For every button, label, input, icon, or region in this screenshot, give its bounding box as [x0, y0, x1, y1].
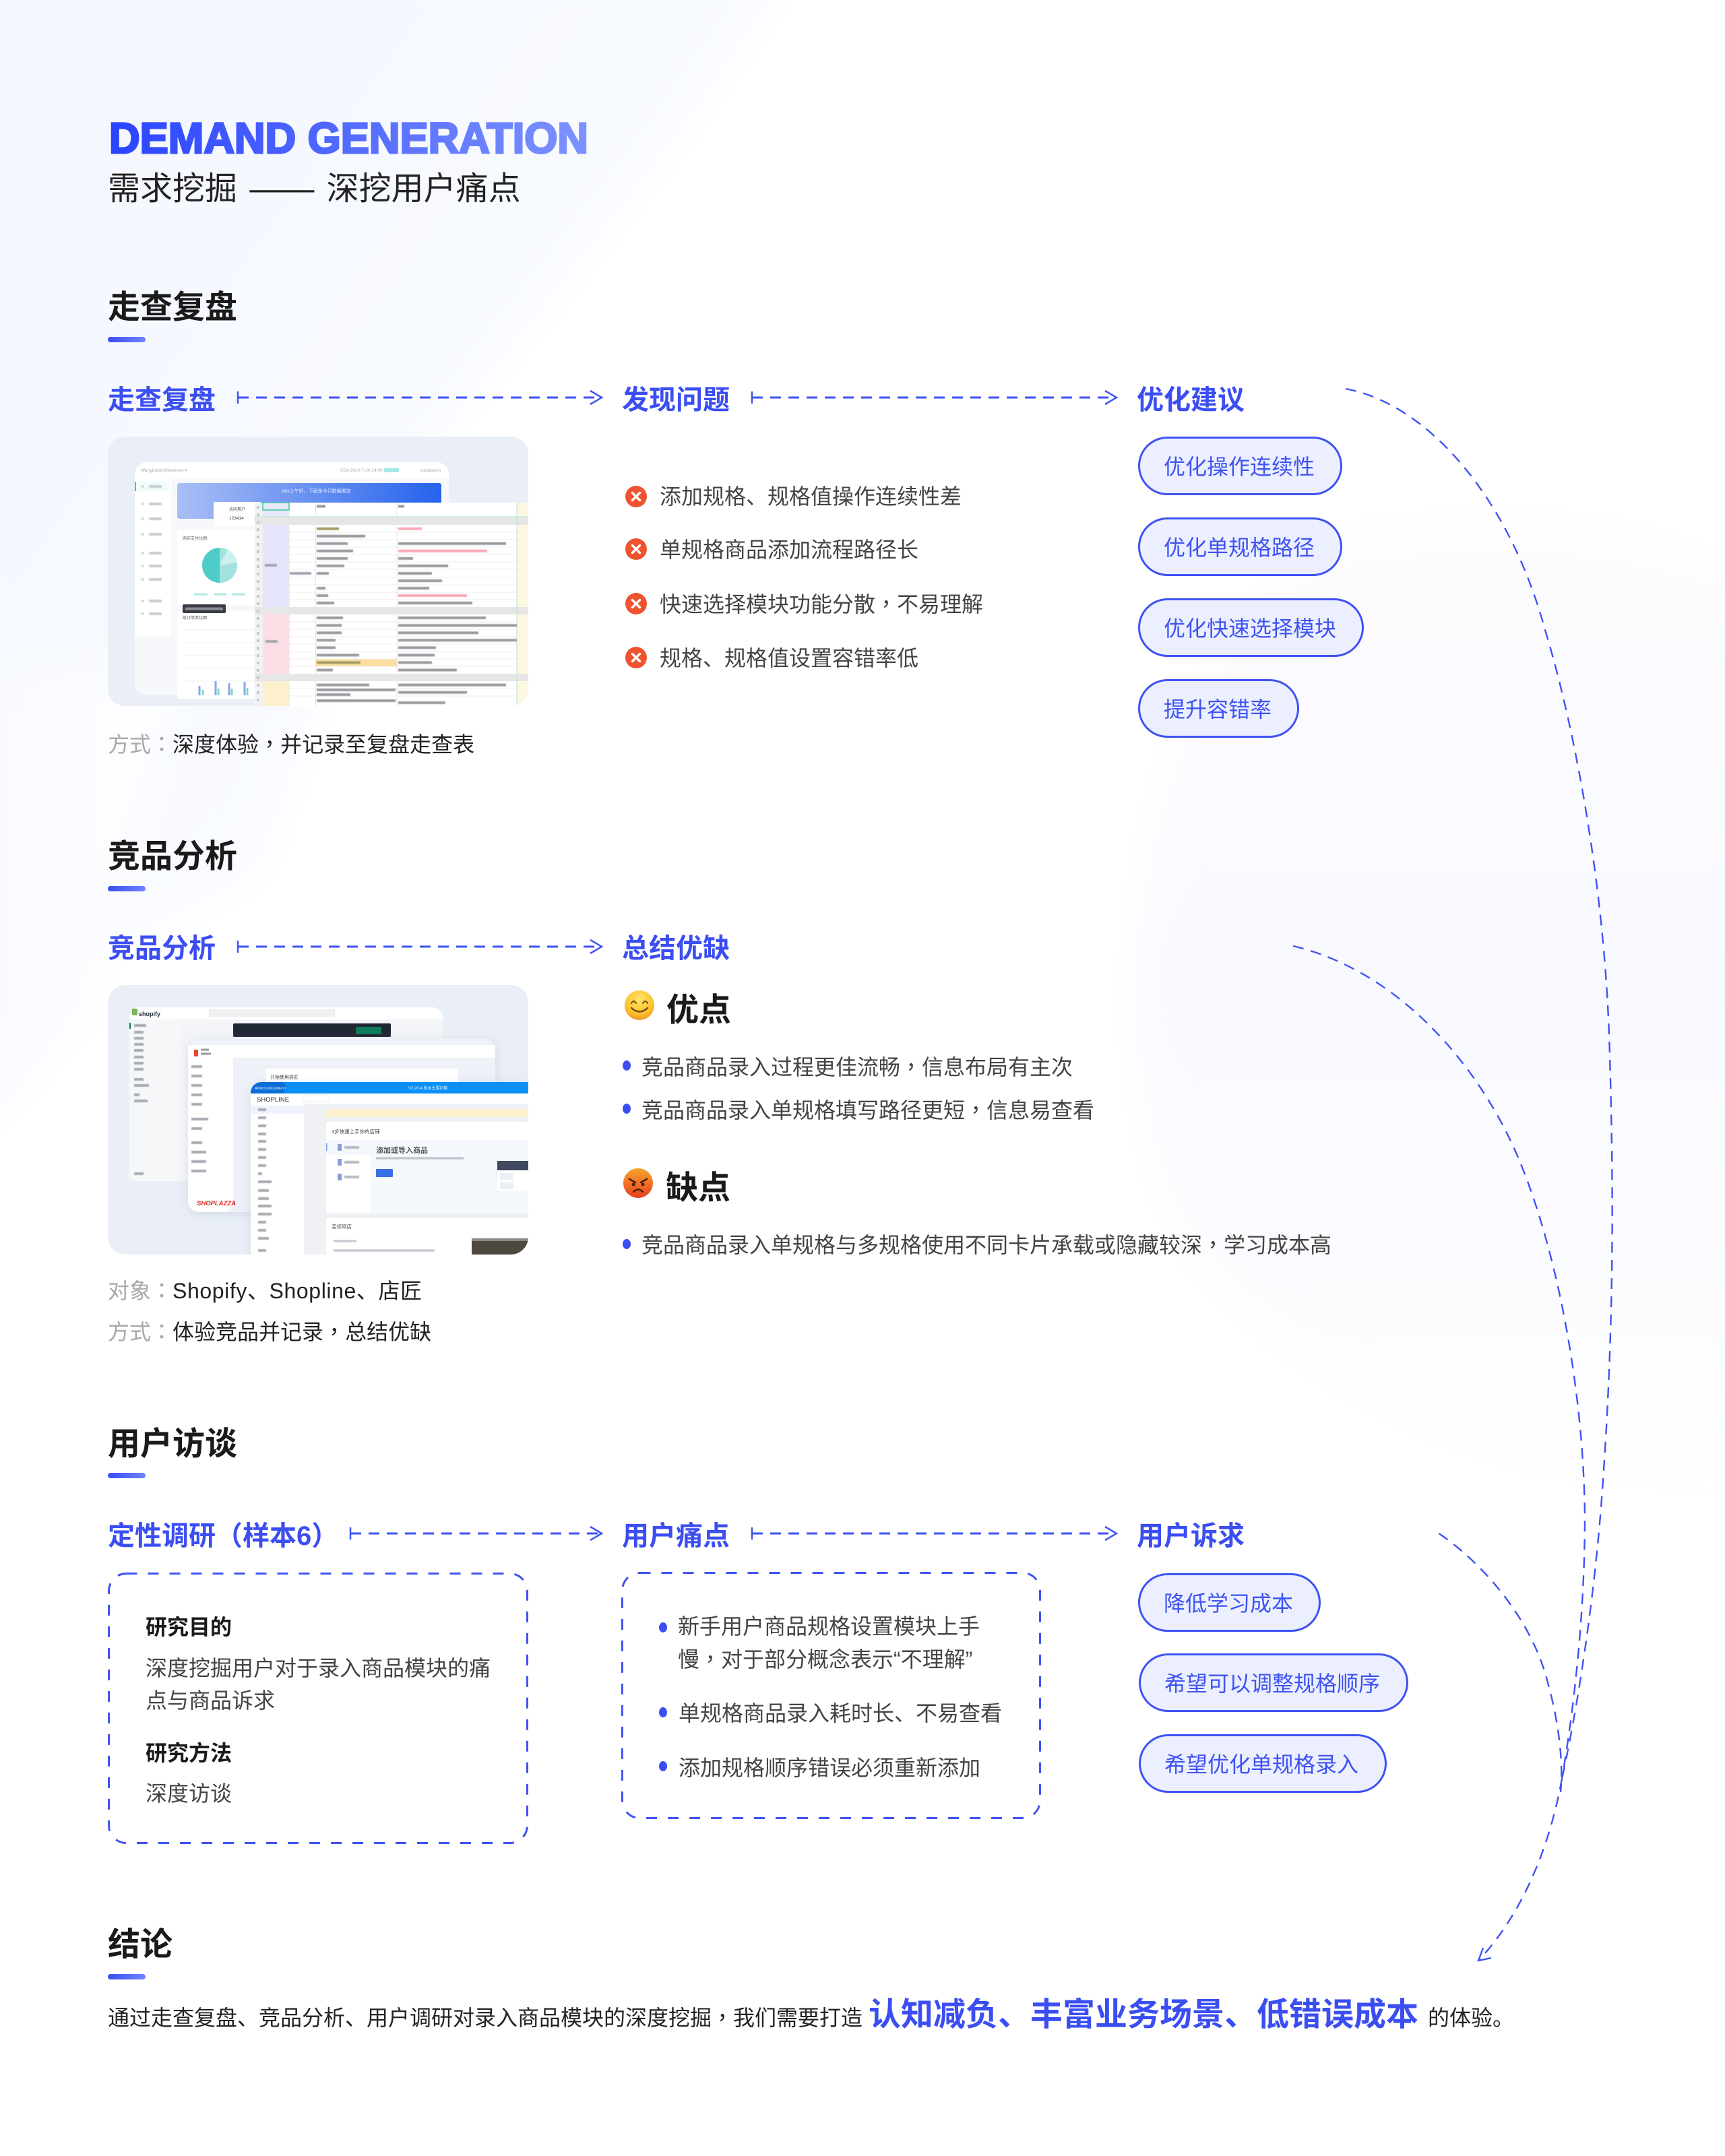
screenshot card: competitor back-ends: SHOPLAZZA	[197, 1200, 236, 1207]
conclusion sentence	[108, 1994, 1530, 2035]
text: lead-in: 通过走查复盘、竞品分析、用户调研对录入商品模块的深度挖掘，我们需要打造	[108, 2001, 862, 2032]
title: DEMAND GENERATION	[109, 114, 588, 162]
problem 1: 添加规格、规格值操作连续性差	[660, 484, 962, 509]
pill: 优化单规格路径	[1138, 517, 1342, 576]
panel: pain points	[621, 1572, 1041, 1819]
arrow: problems to suggestions	[751, 389, 1119, 406]
label: 用户痛点: 用户痛点	[622, 1521, 730, 1551]
panel: research purpose and method	[108, 1573, 528, 1844]
label: 发现问题: 发现问题	[622, 385, 730, 415]
note: method: 方式：体验竞品并记录，总结优缺	[108, 1315, 431, 1346]
heading accent bar	[108, 1473, 146, 1478]
screenshot card: review dashboard and sheet	[108, 437, 528, 706]
pill: 降低学习成本: 降低学习成本	[1164, 1591, 1293, 1616]
label: 优化建议: 优化建议	[1137, 385, 1245, 415]
text: purpose: 点与商品诉求	[146, 1688, 275, 1713]
label: 竞品分析: 竞品分析	[108, 934, 216, 963]
bullet 1	[623, 1060, 631, 1071]
pros block	[620, 984, 1105, 1125]
section heading: 用户访谈: 用户访谈	[108, 1426, 237, 1462]
heading: 优点: 优点	[666, 992, 731, 1028]
text: purpose	[146, 1652, 491, 1717]
icon: error 4	[625, 647, 647, 668]
bullet 2	[659, 1707, 667, 1717]
section heading: 走查复盘: 走查复盘	[108, 290, 237, 325]
section heading: 结论: 结论	[108, 1927, 172, 1963]
pill: 优化快速选择模块	[1138, 598, 1364, 657]
heading accent bar	[108, 337, 146, 342]
screenshot card: competitor back-ends: shopify	[139, 1011, 160, 1017]
arrow: competitors to summary	[237, 939, 604, 954]
problem 3: 快速选择模块功能分散，不易理解	[660, 588, 983, 619]
pill: 优化单规格路径: 优化单规格路径	[1164, 536, 1315, 560]
text: highlight: 认知减负、丰富业务场景、低错误成本	[869, 1997, 1418, 2033]
screenshot card: competitor back-ends: ANNOUNCEMENT	[255, 1087, 287, 1091]
label: 走查复盘: 走查复盘	[108, 385, 216, 415]
screenshot card: review dashboard and sheet: 访问用户	[229, 507, 245, 512]
notes: competitors and method	[108, 1273, 512, 1348]
screenshot card: review dashboard and sheet: 购买支付比例	[183, 536, 207, 541]
screenshot card: review dashboard and sheet: Wangbaixin@belment ▾	[141, 468, 187, 473]
screenshot card: review dashboard and sheet: 123414	[229, 516, 244, 521]
text: closing: 的体验。	[1428, 2006, 1514, 2030]
pain point 1: 慢，对于部分概念表示“不理解”	[678, 1643, 972, 1674]
bullet	[623, 1239, 631, 1249]
arrow: review to problems	[237, 389, 604, 406]
pill: 优化快速选择模块: 优化快速选择模块	[1164, 616, 1336, 641]
problem 2: 单规格商品添加流程路径长	[660, 538, 918, 562]
icon: error 1	[625, 486, 647, 507]
label: 定性调研（样本6）: 定性调研（样本6）	[108, 1521, 338, 1551]
screenshot card: review dashboard and sheet: Wix上午好，下面是今日数据概览	[282, 488, 351, 494]
method note: review: 方式：深度体验，并记录至复盘走查表	[108, 728, 474, 759]
section heading: 竞品分析: 竞品分析	[108, 839, 237, 875]
pain point 1	[678, 1611, 980, 1676]
pill: 希望优化单规格录入	[1139, 1734, 1387, 1793]
label: 用户诉求: 用户诉求	[1137, 1521, 1245, 1551]
heading accent bar	[108, 1974, 146, 1979]
heading: 缺点: 缺点	[666, 1170, 730, 1206]
pill: 优化操作连续性	[1138, 437, 1342, 495]
problem list	[625, 484, 983, 670]
pill: 提升容错率: 提升容错率	[1164, 697, 1272, 722]
pro 1: 竞品商品录入过程更佳流畅，信息布局有主次	[641, 1050, 1073, 1081]
subtitle: 需求挖掘 —— 深挖用户痛点	[108, 171, 521, 207]
label: 总结优缺: 总结优缺	[622, 934, 730, 963]
screenshot card: competitor back-ends: V2.20.4 版本主要功能	[408, 1085, 447, 1091]
cons block	[620, 1162, 1341, 1260]
pill: 希望可以调整规格顺序	[1139, 1653, 1408, 1712]
icon: angry emoji	[623, 1168, 653, 1198]
screenshot card: review dashboard and sheet: 总订单变化图	[183, 615, 207, 621]
icon: error 3	[625, 593, 647, 614]
screenshot card: competitor back-ends: 装修网店	[332, 1223, 352, 1230]
bullet 3	[659, 1761, 667, 1771]
bullet 2	[623, 1104, 631, 1114]
pain point 3: 添加规格顺序错误必须重新添加	[679, 1756, 980, 1780]
icon: error 2	[625, 538, 647, 560]
con 1: 竞品商品录入单规格与多规格使用不同卡片承载或隐藏较深，学习成本高	[641, 1228, 1331, 1259]
screenshot card: competitor back-ends: SHOPLINE	[257, 1096, 289, 1104]
heading: 研究目的: 研究目的	[146, 1615, 232, 1639]
screenshot card: competitor back-ends: 3步快速上手你的店铺	[332, 1128, 380, 1135]
problem 4: 规格、规格值设置容错率低	[660, 646, 918, 670]
pain point 2: 单规格商品录入耗时长、不易查看	[679, 1701, 1002, 1725]
text: purpose: 深度挖掘用户对于录入商品模块的痛	[146, 1656, 491, 1680]
heading: 研究方法: 研究方法	[146, 1741, 232, 1765]
icon: smiling emoji	[625, 990, 654, 1020]
text: method: 深度访谈	[146, 1781, 232, 1806]
bullet 1	[659, 1622, 667, 1632]
screenshot card: competitor back-ends	[108, 985, 528, 1255]
note: target: 对象：Shopify、Shopline、店匠	[108, 1274, 422, 1305]
pill: 希望可以调整规格顺序: 希望可以调整规格顺序	[1164, 1672, 1380, 1696]
heading accent bar	[108, 886, 146, 891]
pill: 优化操作连续性: 优化操作连续性	[1164, 455, 1315, 479]
arrow: research to pain points	[347, 1524, 606, 1544]
pro 2: 竞品商品录入单规格填写路径更短，信息易查看	[641, 1093, 1094, 1124]
pill: 降低学习成本	[1138, 1573, 1321, 1632]
pill: 提升容错率	[1138, 679, 1299, 738]
screenshot card: review dashboard and sheet: wangbaixin	[420, 469, 441, 473]
pill: 希望优化单规格录入: 希望优化单规格录入	[1164, 1752, 1358, 1777]
pain point 1: 新手用户商品规格设置模块上手	[678, 1614, 980, 1639]
arrow: pain points to needs	[748, 1524, 1122, 1544]
screenshot card: competitor back-ends: 开始使用店匠	[270, 1074, 299, 1080]
screenshot card: review dashboard and sheet: USA 2020-7-20 14:00:00	[340, 468, 389, 473]
screenshot card: competitor back-ends: 添加或导入商品	[376, 1145, 428, 1155]
